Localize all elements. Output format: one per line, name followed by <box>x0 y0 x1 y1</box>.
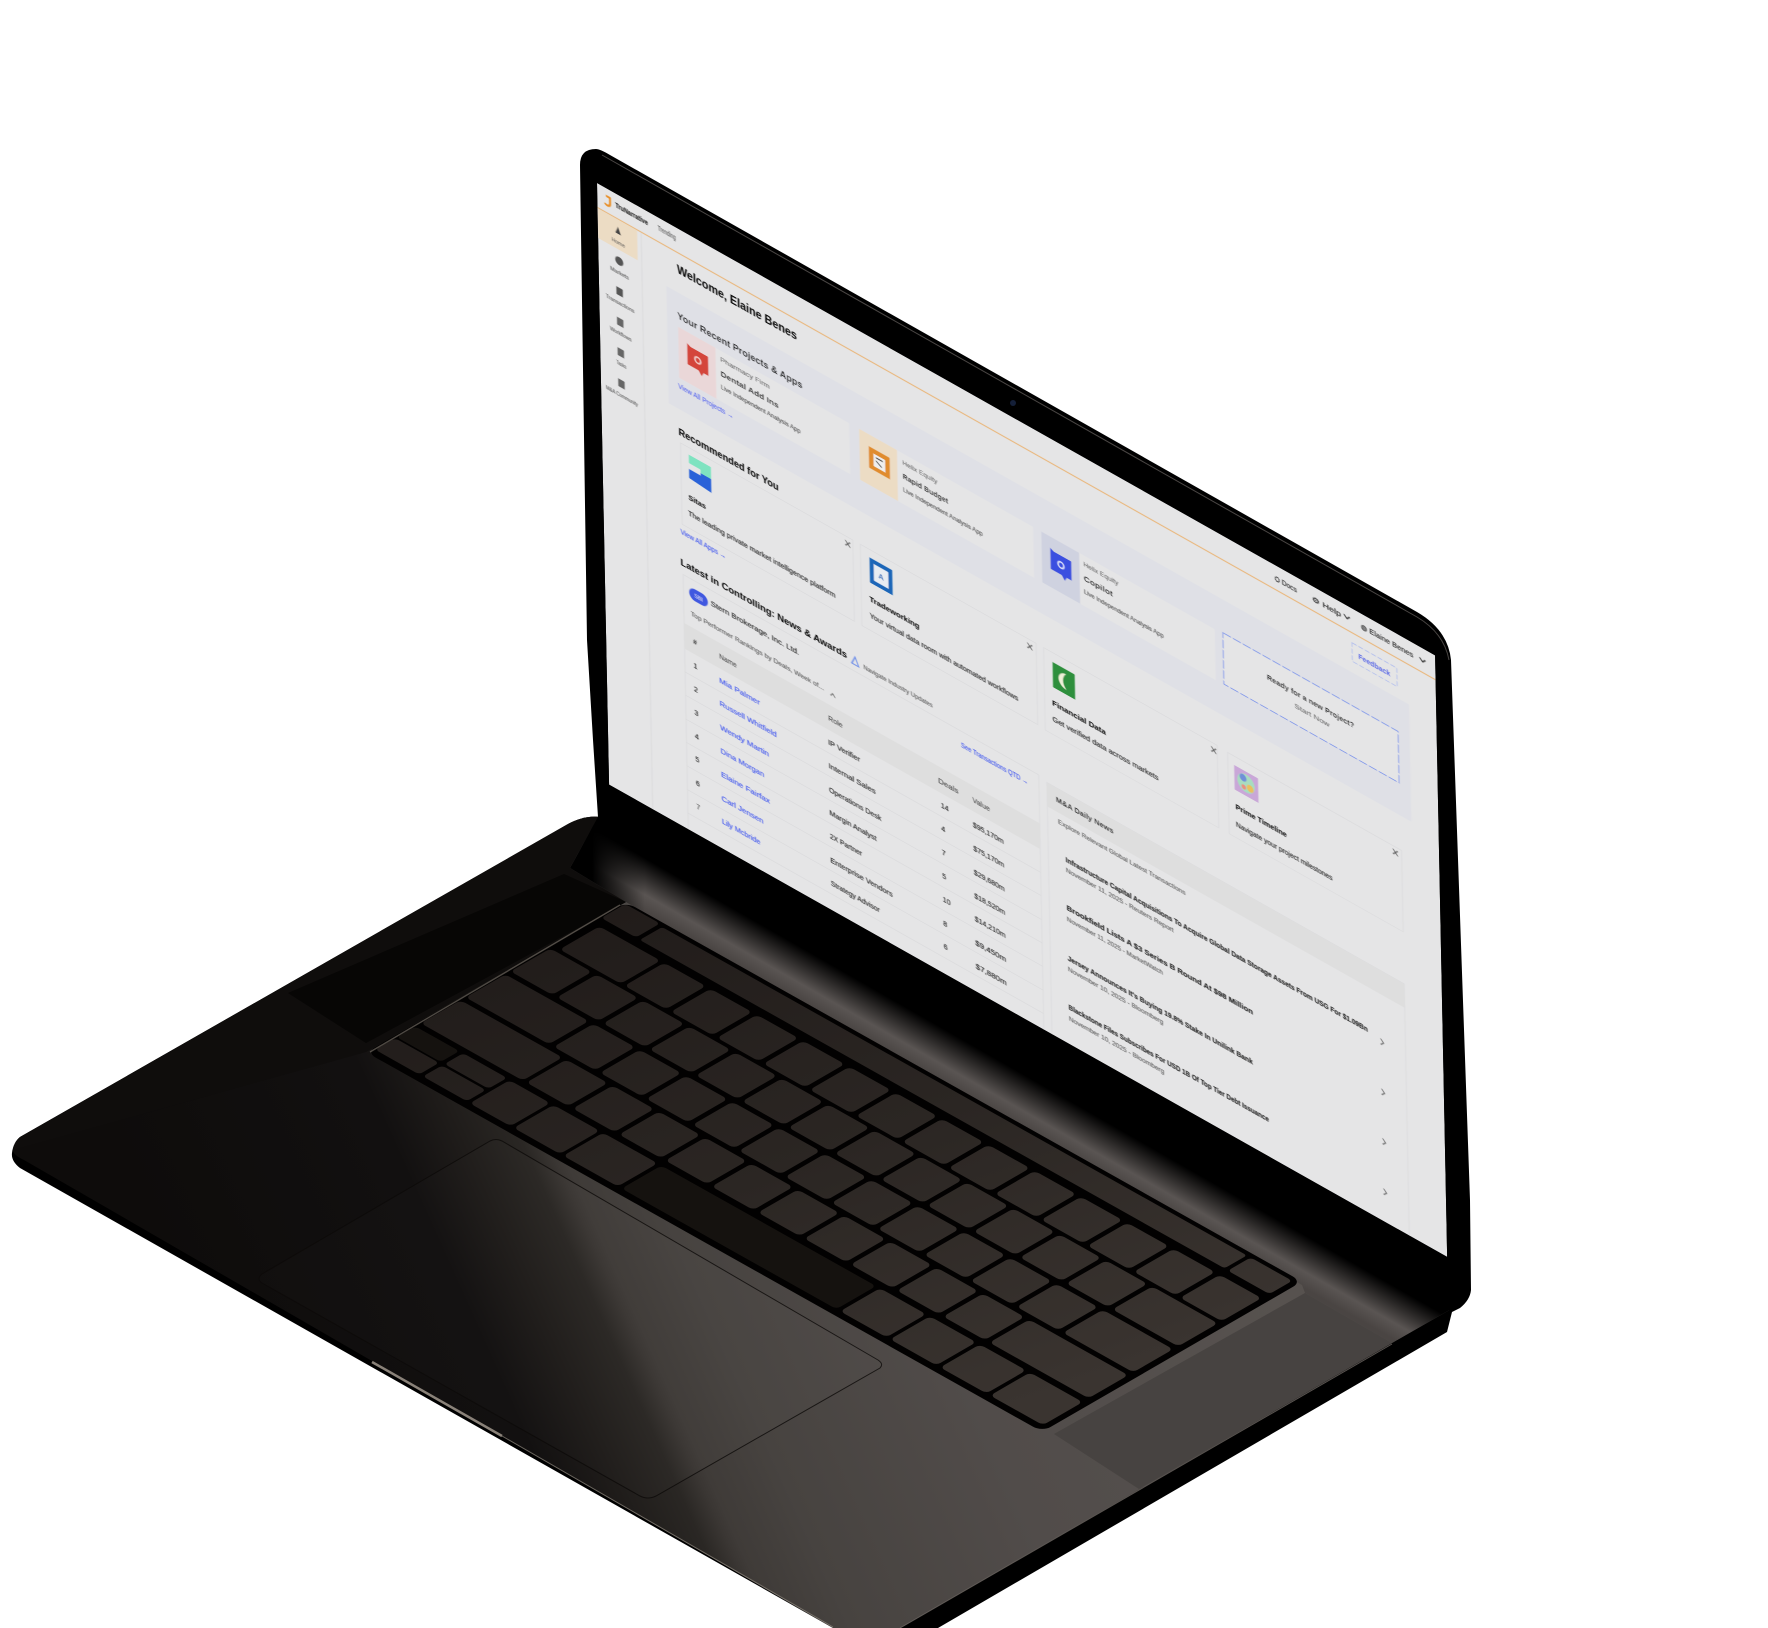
card: financial data: Get verified data across markets <box>1052 715 1159 783</box>
table rows: 2X Partner <box>830 832 862 858</box>
brokerage pill <box>689 586 708 609</box>
news item 1: Infrastructure Capital Acquisitions To Acquire Global Data Storage Assets From USG For $1.09Bn <box>1066 855 1368 1034</box>
front edge light line <box>502 1436 833 1627</box>
chevron <box>1344 614 1350 620</box>
card: dental add ins: Pharmacy Firm <box>720 357 770 391</box>
news item 4 <box>1069 1003 1387 1201</box>
table rows: 5 <box>942 871 946 882</box>
nav: community: M&A Community <box>606 385 638 408</box>
card: sitas: × <box>844 535 851 553</box>
base outer edge <box>12 817 1453 1628</box>
panel background <box>666 286 1411 822</box>
brokerage pill: SBI <box>694 594 703 604</box>
table rows: $18,520m <box>974 891 1005 917</box>
logo text: TruNarrative <box>615 200 648 227</box>
table rows: 7 <box>696 802 700 812</box>
table rows: Lily Mcbride <box>722 817 761 847</box>
table rows: Elaine Fairfax <box>721 770 770 806</box>
news item 4: Blackstone Files Subscribes For USD 1B Of Top Tier Debt Issuance <box>1069 1003 1269 1124</box>
table rows: Dina Morgan <box>721 746 764 779</box>
keys <box>374 904 1294 1425</box>
table rows: Carl Jensen <box>721 794 764 826</box>
dark key slot <box>397 1026 459 1062</box>
nav: workflows <box>610 313 632 344</box>
row dividers <box>685 672 1044 1013</box>
feedback button: Feedback <box>1358 652 1391 679</box>
heading side note <box>852 655 933 710</box>
help link: ⚙ Help <box>1312 594 1341 619</box>
caret <box>830 692 835 698</box>
card: rapid budget <box>859 429 1034 578</box>
card: new project <box>1223 633 1399 783</box>
table rows: 4 <box>695 731 699 742</box>
illustration: isometric laptop showing dashboard <box>12 149 1471 1628</box>
news item 2: Brookfield Lists A $3 Series B Round At $98 Million <box>1067 903 1253 1017</box>
nav: transactions <box>606 280 635 315</box>
card: financial data <box>1044 648 1219 828</box>
latest heading: Latest in Controlling: News & Awards <box>680 557 847 662</box>
icon: purple tile <box>1234 765 1259 803</box>
table rows: 3 <box>694 708 698 719</box>
table rows: 7 <box>942 848 946 859</box>
left speaker area <box>288 874 626 1043</box>
front edge notch highlight <box>372 1362 502 1436</box>
feedback button <box>1352 643 1397 687</box>
card: prime timeline: Prime Timeline <box>1235 802 1287 840</box>
link: leaderboard: See Transactions QTD → <box>961 740 1028 787</box>
laptop lid <box>580 149 1471 1312</box>
news item 4: November 10, 2025 - Bloomberg <box>1069 1015 1165 1076</box>
card: financial data: × <box>1210 741 1218 760</box>
news item 2 <box>1067 903 1385 1102</box>
card border <box>683 574 1044 1038</box>
nav: markets <box>610 252 629 282</box>
table header <box>684 623 1040 849</box>
link: view all apps: View All Apps → <box>680 527 726 561</box>
sidebar divider <box>641 233 653 809</box>
hinge shadow band <box>570 780 1460 1343</box>
table header: Value <box>972 795 990 814</box>
card: new project: Start Now <box>1294 703 1331 730</box>
user: ◍ Elaine Benes <box>1361 622 1413 660</box>
nav: tasks <box>616 346 626 371</box>
table rows: 5 <box>695 755 699 765</box>
card: prime timeline: Navigate your project milestones <box>1236 820 1333 883</box>
table rows: $7,880m <box>976 962 1007 988</box>
brokerage name: Stern Brokerage, Inc. Ltd. <box>711 599 799 657</box>
card: prime timeline: × <box>1392 844 1399 862</box>
nav trending: Trending <box>658 224 676 242</box>
news item 3: November 10, 2025 - Bloomberg <box>1068 966 1164 1027</box>
icon: blue flag <box>1050 548 1072 585</box>
nav: home <box>611 223 625 250</box>
card: sitas: Sitas <box>688 493 706 511</box>
trackpad <box>259 1140 882 1498</box>
card: sitas: The leading private market intelligence platform <box>688 509 836 600</box>
active tile <box>598 208 638 260</box>
table rows: Mia Palmer <box>719 676 760 707</box>
header line <box>597 207 1436 680</box>
news subtitle: Explore Relevant Global Latest Transactions <box>1058 819 1186 898</box>
hinge left fade <box>570 780 650 916</box>
space bar <box>622 1165 876 1309</box>
table rows: 14 <box>941 801 949 814</box>
card: tradeworking: Tradeworking <box>869 594 920 631</box>
card: rapid budget: Live Independent Analysis App <box>903 487 983 538</box>
table rows: 10 <box>943 895 951 907</box>
webcam <box>1010 400 1016 406</box>
chevron <box>1420 657 1425 663</box>
card: copilot: Helix Equity <box>1083 561 1119 588</box>
card: sitas <box>680 443 854 621</box>
table rows: Strategy Advisor <box>831 879 880 915</box>
card: prime timeline <box>1228 751 1403 932</box>
link: view all projects: View All Projects → <box>678 381 734 421</box>
laptop base <box>12 780 1460 1628</box>
card: financial data: Financial Data <box>1052 698 1106 737</box>
bezel highlight <box>602 155 1449 660</box>
base top surface <box>13 817 1453 1628</box>
card border <box>1047 782 1410 1247</box>
news item 2: November 11, 2025 - MarketWatch <box>1067 916 1163 977</box>
icon: document <box>872 561 891 592</box>
dark back-left zone <box>13 817 626 1150</box>
header bar <box>597 190 1436 680</box>
news title: M&A Daily News <box>1056 795 1114 836</box>
table rows: 6 <box>944 942 948 952</box>
card: dental add ins: Dental Add Ins <box>720 369 779 411</box>
table rows: $14,210m <box>975 914 1006 940</box>
card: dental add ins: Live Independent Analysis App <box>721 384 801 436</box>
table rows: 6 <box>696 778 700 789</box>
news item 3: Jersey Announces It's Buying 19.8% Stake In Unilink Bank <box>1068 954 1253 1067</box>
table rows: Wendy Martin <box>720 723 769 759</box>
table subtitle: Top Performer Rankings by Deals, Week of... <box>691 611 824 692</box>
card: copilot: Live Independent Analysis App <box>1084 589 1164 640</box>
keyboard edge highlight <box>370 905 620 1052</box>
keyboard well <box>366 902 1302 1432</box>
nav: workflows: Workflows <box>610 326 632 344</box>
welcome heading: Welcome, Elaine Benes <box>677 262 797 343</box>
table rows: IP Verifier <box>828 738 861 764</box>
right speaker grille <box>1054 1293 1392 1489</box>
card: tradeworking <box>860 544 1038 725</box>
table rows: Internal Sales <box>828 761 876 796</box>
recommended heading: Recommended for You <box>678 426 779 494</box>
table rows: $75,170m <box>973 844 1004 870</box>
table rows: Enterprise Vendors <box>830 855 893 899</box>
panel heading: Your Recent Projects & Apps <box>677 311 803 392</box>
screen background <box>597 183 1447 1257</box>
card: new project: Ready for a new Project? <box>1267 673 1354 731</box>
nav: markets: Markets <box>610 266 629 282</box>
nav: home: Home <box>612 237 625 250</box>
card: copilot <box>1041 532 1216 680</box>
table rows: 4 <box>941 824 945 835</box>
icon: green tile <box>1053 662 1075 700</box>
keyboard <box>366 902 1302 1432</box>
card: tradeworking: × <box>1026 638 1034 656</box>
table header: Name <box>719 652 737 670</box>
card: tradeworking: A <box>878 571 884 583</box>
table rows: $29,680m <box>974 868 1005 894</box>
screen dashboard <box>597 183 1447 1268</box>
table rows: Russell Whitfield <box>720 699 777 740</box>
panel: league table <box>683 574 1044 1038</box>
table rows: 1 <box>693 661 698 671</box>
sidebar <box>598 208 653 809</box>
table rows: $9,450m <box>975 938 1006 964</box>
news item 3 <box>1068 954 1386 1152</box>
card: rapid budget: Rapid Budget <box>903 472 948 506</box>
nav: community <box>606 371 638 408</box>
table rows: 8 <box>943 918 947 929</box>
table rows: Margin Analyst <box>829 808 878 844</box>
heading side note: Navigate Industry Updates <box>863 664 933 710</box>
card: rapid budget: Helix Equity <box>902 460 938 486</box>
card: dental add ins <box>678 327 850 474</box>
card: copilot: Copilot <box>1084 574 1113 599</box>
news item 1: November 11, 2025 - Reuters Report <box>1066 867 1174 934</box>
card: tradeworking: Your virtual data room with automated workflows <box>870 611 1019 703</box>
table rows: 2 <box>694 685 698 695</box>
nav: transactions: Transactions <box>606 294 635 315</box>
table header: # <box>693 637 698 648</box>
table rows <box>693 661 1007 988</box>
logo icon <box>605 195 610 207</box>
icon: orange flag <box>869 446 890 479</box>
panel: daily news <box>1047 782 1410 1247</box>
panel: recent projects <box>666 286 1411 822</box>
table rows: $95,170m <box>973 821 1004 846</box>
docs link: ⛭ Docs <box>1275 574 1297 595</box>
icon: sitas <box>689 455 711 479</box>
table header: Deals <box>938 776 959 796</box>
lid bezel <box>580 149 1471 1312</box>
nav: tasks: Tasks <box>616 360 626 371</box>
news header band <box>1047 782 1405 1008</box>
right edge light line <box>900 1344 1392 1628</box>
table rows: Operations Desk <box>829 785 882 823</box>
table header: Role <box>828 713 843 730</box>
icon: red flag <box>687 343 709 380</box>
